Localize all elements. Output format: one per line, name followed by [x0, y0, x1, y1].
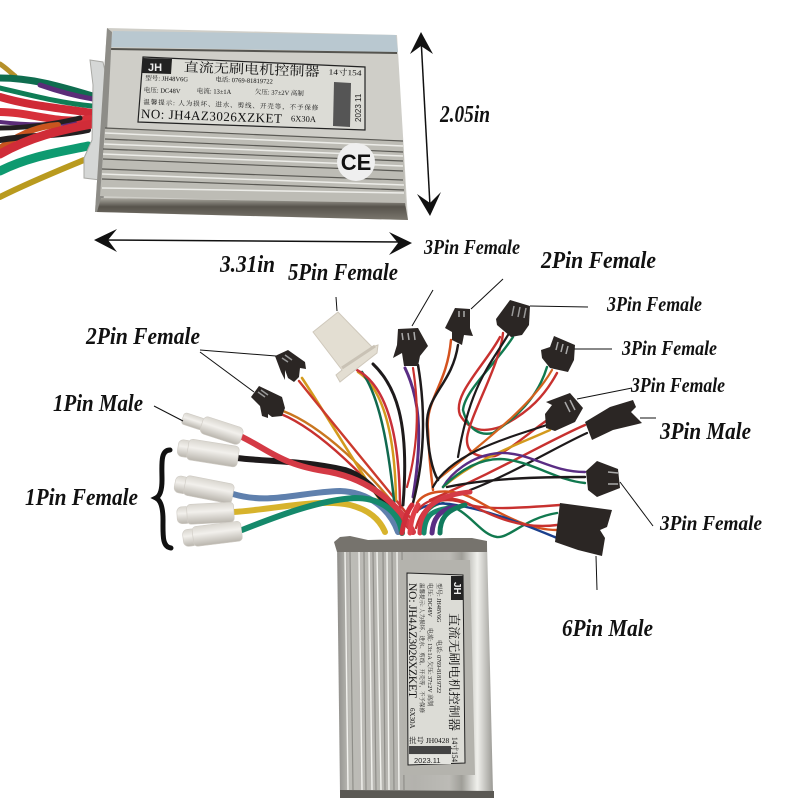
connector labels: 5Pin Female — [288, 260, 398, 286]
bullet: 1pin female top — [176, 437, 240, 467]
connector: 2pin female lower — [251, 386, 285, 418]
connector: 3pin female right middle — [545, 393, 583, 431]
bottom product label: 电压: DC48V — [426, 583, 434, 618]
dimension labels: 3.31in — [219, 252, 275, 278]
product label: 型号: JH48V6G — [145, 73, 189, 84]
bottom product label: 温馨提示: 人为损坏、进水、剪线、开壳等，不予保修 — [418, 583, 426, 713]
bullet: 1pin female 3 — [176, 502, 234, 525]
CE mark — [337, 143, 375, 181]
dimension labels: 2.05in — [439, 102, 490, 128]
connector labels: 1Pin Male — [53, 391, 143, 417]
dimension arrow: height — [410, 32, 441, 216]
loops — [459, 337, 557, 430]
connector: 3pin female lower right — [586, 461, 620, 497]
connector labels: 3Pin Female — [423, 235, 520, 259]
bottom product label: JH — [451, 582, 462, 595]
bullet: 1pin female 2 — [173, 473, 235, 504]
product label: JH — [148, 62, 162, 74]
bullet connectors — [173, 409, 244, 548]
bottom product label: 6X30A — [408, 708, 416, 729]
3pin male wires — [430, 425, 585, 500]
product label: 电话: 0769-81819722 — [215, 75, 273, 86]
bullet: 1pin female 4 — [182, 521, 243, 548]
bottom product label: 批号 JH0428 — [409, 735, 449, 745]
connector labels — [25, 235, 762, 642]
connector: 3pin male — [585, 400, 642, 440]
bottom product label: 直流无刷电机控制器 — [447, 613, 462, 731]
connector labels: 3Pin Female — [621, 336, 717, 360]
product label — [138, 57, 365, 130]
top controller wires — [0, 64, 93, 197]
wiring harness — [233, 333, 587, 538]
connector: 6pin male — [555, 503, 612, 556]
bullet: 1pin male — [180, 409, 244, 446]
3pin middle wires — [443, 430, 550, 487]
connector labels: 3Pin Female — [659, 511, 762, 535]
bottom product label: NO: JH4AZ3026XZKET — [406, 583, 418, 698]
bottom product label: 2023.11 — [414, 756, 441, 765]
connector: 2pin female upper — [275, 350, 306, 382]
connector: 3pin female large — [496, 300, 530, 337]
6pin wires — [416, 500, 560, 528]
leader lines — [154, 279, 656, 590]
product label: 6X30A — [291, 113, 317, 124]
product label: 欠压: 37±2V 高制 — [255, 87, 304, 98]
bottom product label — [400, 560, 475, 775]
bottom product label: 电流: 13±1A 欠压: 37±2V 高制 — [426, 628, 434, 706]
connector labels: 1Pin Female — [25, 485, 138, 511]
dimension labels — [219, 102, 490, 278]
connector labels: 3Pin Male — [659, 419, 751, 445]
product label: 温馨提示: 人为损坏、进水、剪线、开壳等，不予保修 — [143, 97, 319, 112]
connector: 3pin female right upper — [541, 336, 575, 372]
2pin top wires — [428, 340, 451, 490]
connector labels: 6Pin Male — [562, 616, 653, 642]
bottom controller — [334, 536, 494, 798]
bottom product label: 型号: JH48V6G — [435, 583, 443, 623]
product label: NO: JH4AZ3026XZKET — [141, 106, 282, 126]
product label: 14寸154 — [328, 66, 362, 78]
top controller — [84, 28, 408, 220]
product label: 2023 11 — [354, 93, 363, 122]
connector: 2pin female top — [445, 308, 473, 345]
connector labels: 3Pin Female — [606, 292, 702, 316]
connector labels: 2Pin Female — [85, 324, 200, 350]
3pin lower wires — [443, 453, 585, 487]
center 3pin wires — [405, 368, 419, 497]
connector: 3pin female center — [393, 328, 428, 366]
dimension arrow: width — [94, 229, 412, 255]
CE mark: CE — [341, 150, 371, 175]
bottom product label: 14寸154 — [450, 737, 460, 762]
product label: 直流无刷电机控制器 — [183, 59, 320, 79]
brace: 1pin female — [156, 450, 171, 548]
end cap — [84, 60, 107, 180]
product label: 电压: DC48V — [144, 85, 181, 95]
connector labels: 2Pin Female — [540, 248, 656, 274]
bottom product label: 电话: 0769-81819722 — [435, 640, 443, 693]
connector labels: 3Pin Female — [630, 373, 725, 397]
thick motor wires — [237, 458, 396, 525]
product label: 电流: 13±1A — [197, 86, 232, 96]
connector: 5pin female — [313, 312, 378, 382]
